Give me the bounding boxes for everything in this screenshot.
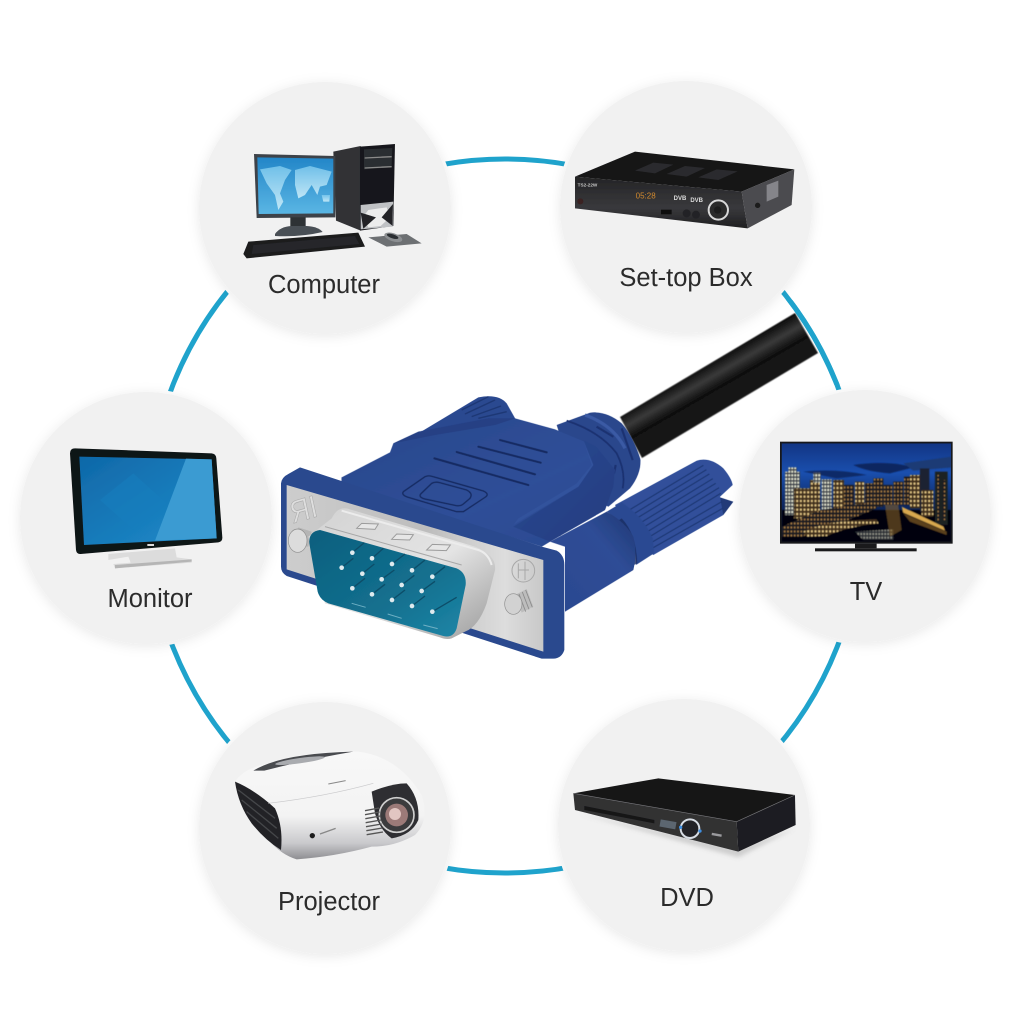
- icon: set-top box: TS2-22W: [578, 182, 598, 187]
- mirrored R mark: IR: [287, 489, 321, 531]
- icon: set-top box: 05:28: [636, 191, 656, 200]
- panel: TV: [736, 387, 994, 645]
- label: Projector: Projector: [278, 888, 381, 916]
- icon: TV: [780, 442, 953, 551]
- icon: set-top box: DVB: [690, 198, 704, 204]
- icon: projector: [235, 751, 425, 859]
- panel: DVD: [555, 696, 813, 954]
- icon: DVD player: [573, 778, 796, 857]
- panel: set-top box: [557, 78, 815, 336]
- panel: projector: [196, 699, 454, 957]
- label: DVD: DVD: [660, 884, 714, 912]
- panel: computer: [196, 79, 454, 337]
- icon: monitor: [70, 448, 222, 568]
- D-sub shell: [308, 508, 495, 639]
- icon: set-top box: DVB: [674, 196, 687, 202]
- panel: monitor: [17, 389, 275, 647]
- teal pin insert: [309, 530, 466, 636]
- strain relief collar: [557, 412, 641, 507]
- cable: [620, 313, 818, 458]
- label: Set-top Box: Set-top Box: [619, 264, 753, 292]
- connector hood: [342, 418, 615, 547]
- faceplate: [281, 467, 564, 659]
- label: TV: TV: [850, 578, 882, 606]
- front thumbscrew: [550, 460, 733, 612]
- icon: set-top box: [575, 152, 794, 228]
- label: Monitor: Monitor: [107, 585, 193, 613]
- VGA connector: [281, 396, 733, 659]
- icon: desktop computer: [243, 144, 422, 258]
- connecting ring: [148, 159, 862, 873]
- left screw: [288, 527, 312, 552]
- right screw: [505, 589, 533, 614]
- label: Computer: Computer: [268, 271, 380, 299]
- ring overlap at cable end: [786, 300, 840, 385]
- rear thumbscrew: [418, 396, 516, 440]
